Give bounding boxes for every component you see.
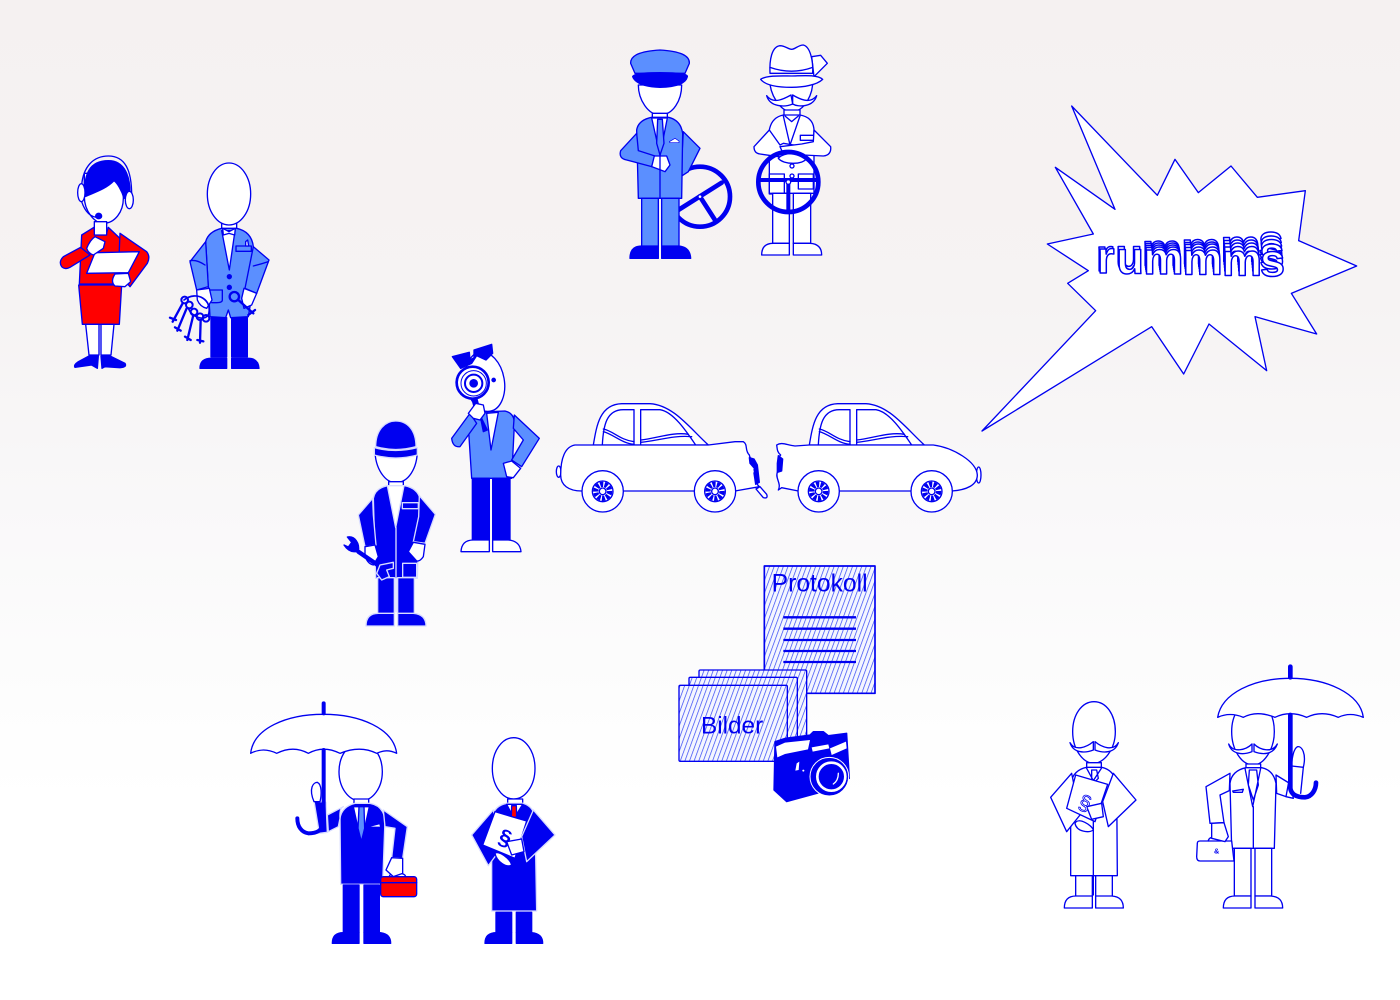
- text: rummms: [1096, 216, 1285, 286]
- label: Protokoll: Protokoll: [772, 571, 868, 598]
- icon: wrench: [344, 537, 393, 580]
- text: rummms: m: [1142, 225, 1182, 276]
- document stack: Bilder: [679, 670, 807, 761]
- document: Protokoll: [764, 566, 875, 693]
- figure: lawyer outline with moustache and paragraph document: [1051, 702, 1136, 908]
- text: rummms: s: [1259, 219, 1284, 270]
- text: rummms: s: [1258, 216, 1283, 267]
- text: rummms: u: [1116, 233, 1144, 284]
- figure: outlined agent with moustache, umbrella and briefcase: [1197, 667, 1363, 908]
- text: rummms: m: [1182, 225, 1222, 276]
- text: rummms: m: [1222, 234, 1262, 285]
- figure: detective with magnifier and sunglasses: [452, 344, 539, 552]
- car: left damaged car: [556, 404, 767, 512]
- text: rummms: m: [1222, 230, 1262, 281]
- figure: insurance agent with umbrella and red briefcase: [251, 703, 417, 943]
- figure: man with bunch of keys: [170, 163, 269, 368]
- text: rummms: m: [1182, 230, 1222, 281]
- text: rummms: m: [1182, 228, 1222, 279]
- icon: camera: [774, 732, 849, 802]
- text: rummms: m: [1221, 226, 1261, 277]
- text: rummms: m: [1143, 229, 1183, 280]
- figure: lawyer in robe with paragraph document: [472, 738, 555, 943]
- icon: umbrella: [251, 703, 397, 833]
- figure: outlined agent with moustache, umbrella and briefcase: &: [1214, 846, 1220, 855]
- text: rummms: s: [1259, 223, 1284, 274]
- icon: umbrella: [1218, 667, 1363, 797]
- icon: keys: [170, 292, 255, 343]
- icon: steering wheel: [758, 152, 818, 212]
- text lines: [783, 617, 856, 662]
- text: rummms: m: [1143, 231, 1183, 282]
- text: rummms: m: [1221, 223, 1261, 274]
- icon: sunglasses: [452, 344, 493, 368]
- text: rummms: r: [1097, 232, 1115, 283]
- figure: driver with hat, moustache and steering wheel: [754, 45, 831, 255]
- figure: mechanic with wrench: [344, 421, 435, 626]
- icon: paragraph sign: §: [495, 824, 515, 851]
- text: rummms: m: [1221, 220, 1261, 271]
- car wheel: [798, 471, 839, 512]
- icon: magnifying glass: [457, 367, 489, 407]
- label: Bilder: Bilder: [701, 712, 763, 739]
- car wheel: [694, 471, 736, 512]
- text: rummms: s: [1260, 235, 1285, 286]
- text: rummms: m: [1183, 234, 1223, 285]
- text: rummms: m: [1181, 223, 1221, 274]
- text: rummms: m: [1143, 233, 1183, 284]
- car: right damaged car: [777, 404, 981, 512]
- icon: steering wheel: [670, 167, 730, 227]
- text: rummms: u: [1115, 230, 1143, 281]
- speech burst: crash sound: [982, 106, 1357, 431]
- text: rummms: m: [1142, 227, 1182, 278]
- icon: paragraph sign: §: [1076, 791, 1094, 816]
- text: rummms: s: [1259, 227, 1284, 278]
- car wheel: [911, 471, 952, 512]
- figure: chauffeur in uniform with steering wheel: [620, 50, 730, 258]
- text: rummms: r: [1096, 230, 1114, 281]
- figure: call centre woman with headset and tablet: [60, 156, 149, 368]
- car wheel: [582, 471, 623, 512]
